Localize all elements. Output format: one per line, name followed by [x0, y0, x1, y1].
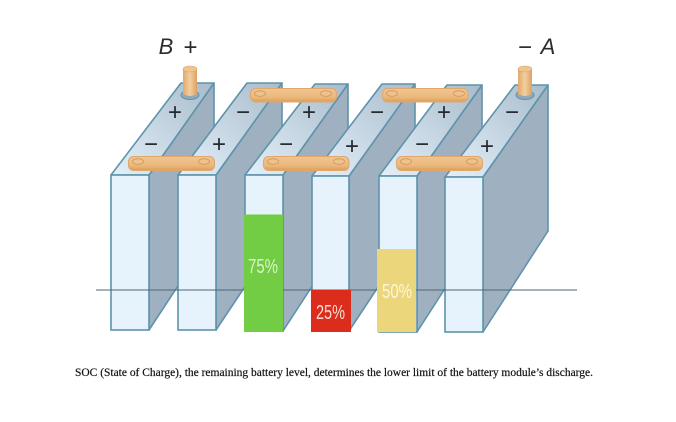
connector strap: cells 3 and 4 [264, 156, 349, 170]
polarity signs: − [370, 99, 384, 126]
bar: 75% state of charge [244, 214, 283, 332]
label: B plus: B [159, 34, 173, 59]
negative terminal post A [516, 66, 534, 100]
connector strap: cells 1 and 2 [128, 156, 214, 170]
polarity signs: − [279, 131, 293, 158]
bar: 50% state of charge [377, 249, 416, 332]
connector strap: cells 5 and 6 [396, 156, 482, 170]
label: minus A [518, 34, 555, 61]
polarity signs: + [168, 99, 182, 126]
polarity signs: − [505, 99, 519, 126]
polarity signs: + [437, 99, 451, 126]
label: B plus: + [183, 34, 198, 61]
bar: 25% state of charge [311, 290, 351, 332]
battery cell 5 [379, 85, 482, 332]
label: minus A: A [539, 34, 555, 59]
bar: 50% state of charge: 50% [382, 281, 412, 303]
polarity signs [144, 99, 519, 160]
polarity signs: + [302, 99, 316, 126]
caption: SOC (State of Charge), the remaining battery level, determines the lower limit of the battery module’s discharge. [75, 365, 593, 379]
polarity signs: − [144, 131, 158, 158]
label: B plus [159, 34, 198, 61]
polarity signs: − [415, 131, 429, 158]
polarity signs: + [212, 131, 226, 158]
discharge limit line [96, 289, 577, 291]
bar: 75% state of charge: 75% [248, 256, 278, 278]
connector strap: cells 4 and 5 [382, 88, 468, 102]
bar: 25% state of charge: 25% [316, 302, 345, 324]
polarity signs: + [345, 133, 359, 160]
polarity signs: + [480, 133, 494, 160]
battery cell 6 [445, 85, 548, 332]
polarity signs: − [236, 99, 250, 126]
positive terminal post B [181, 66, 199, 100]
battery cell 3 [245, 84, 348, 331]
label: minus A: − [518, 34, 532, 61]
battery cell 4 [312, 84, 415, 331]
connector strap: cells 2 and 3 [250, 88, 336, 102]
battery cell 1 [111, 83, 214, 330]
battery cell 2 [178, 83, 282, 330]
